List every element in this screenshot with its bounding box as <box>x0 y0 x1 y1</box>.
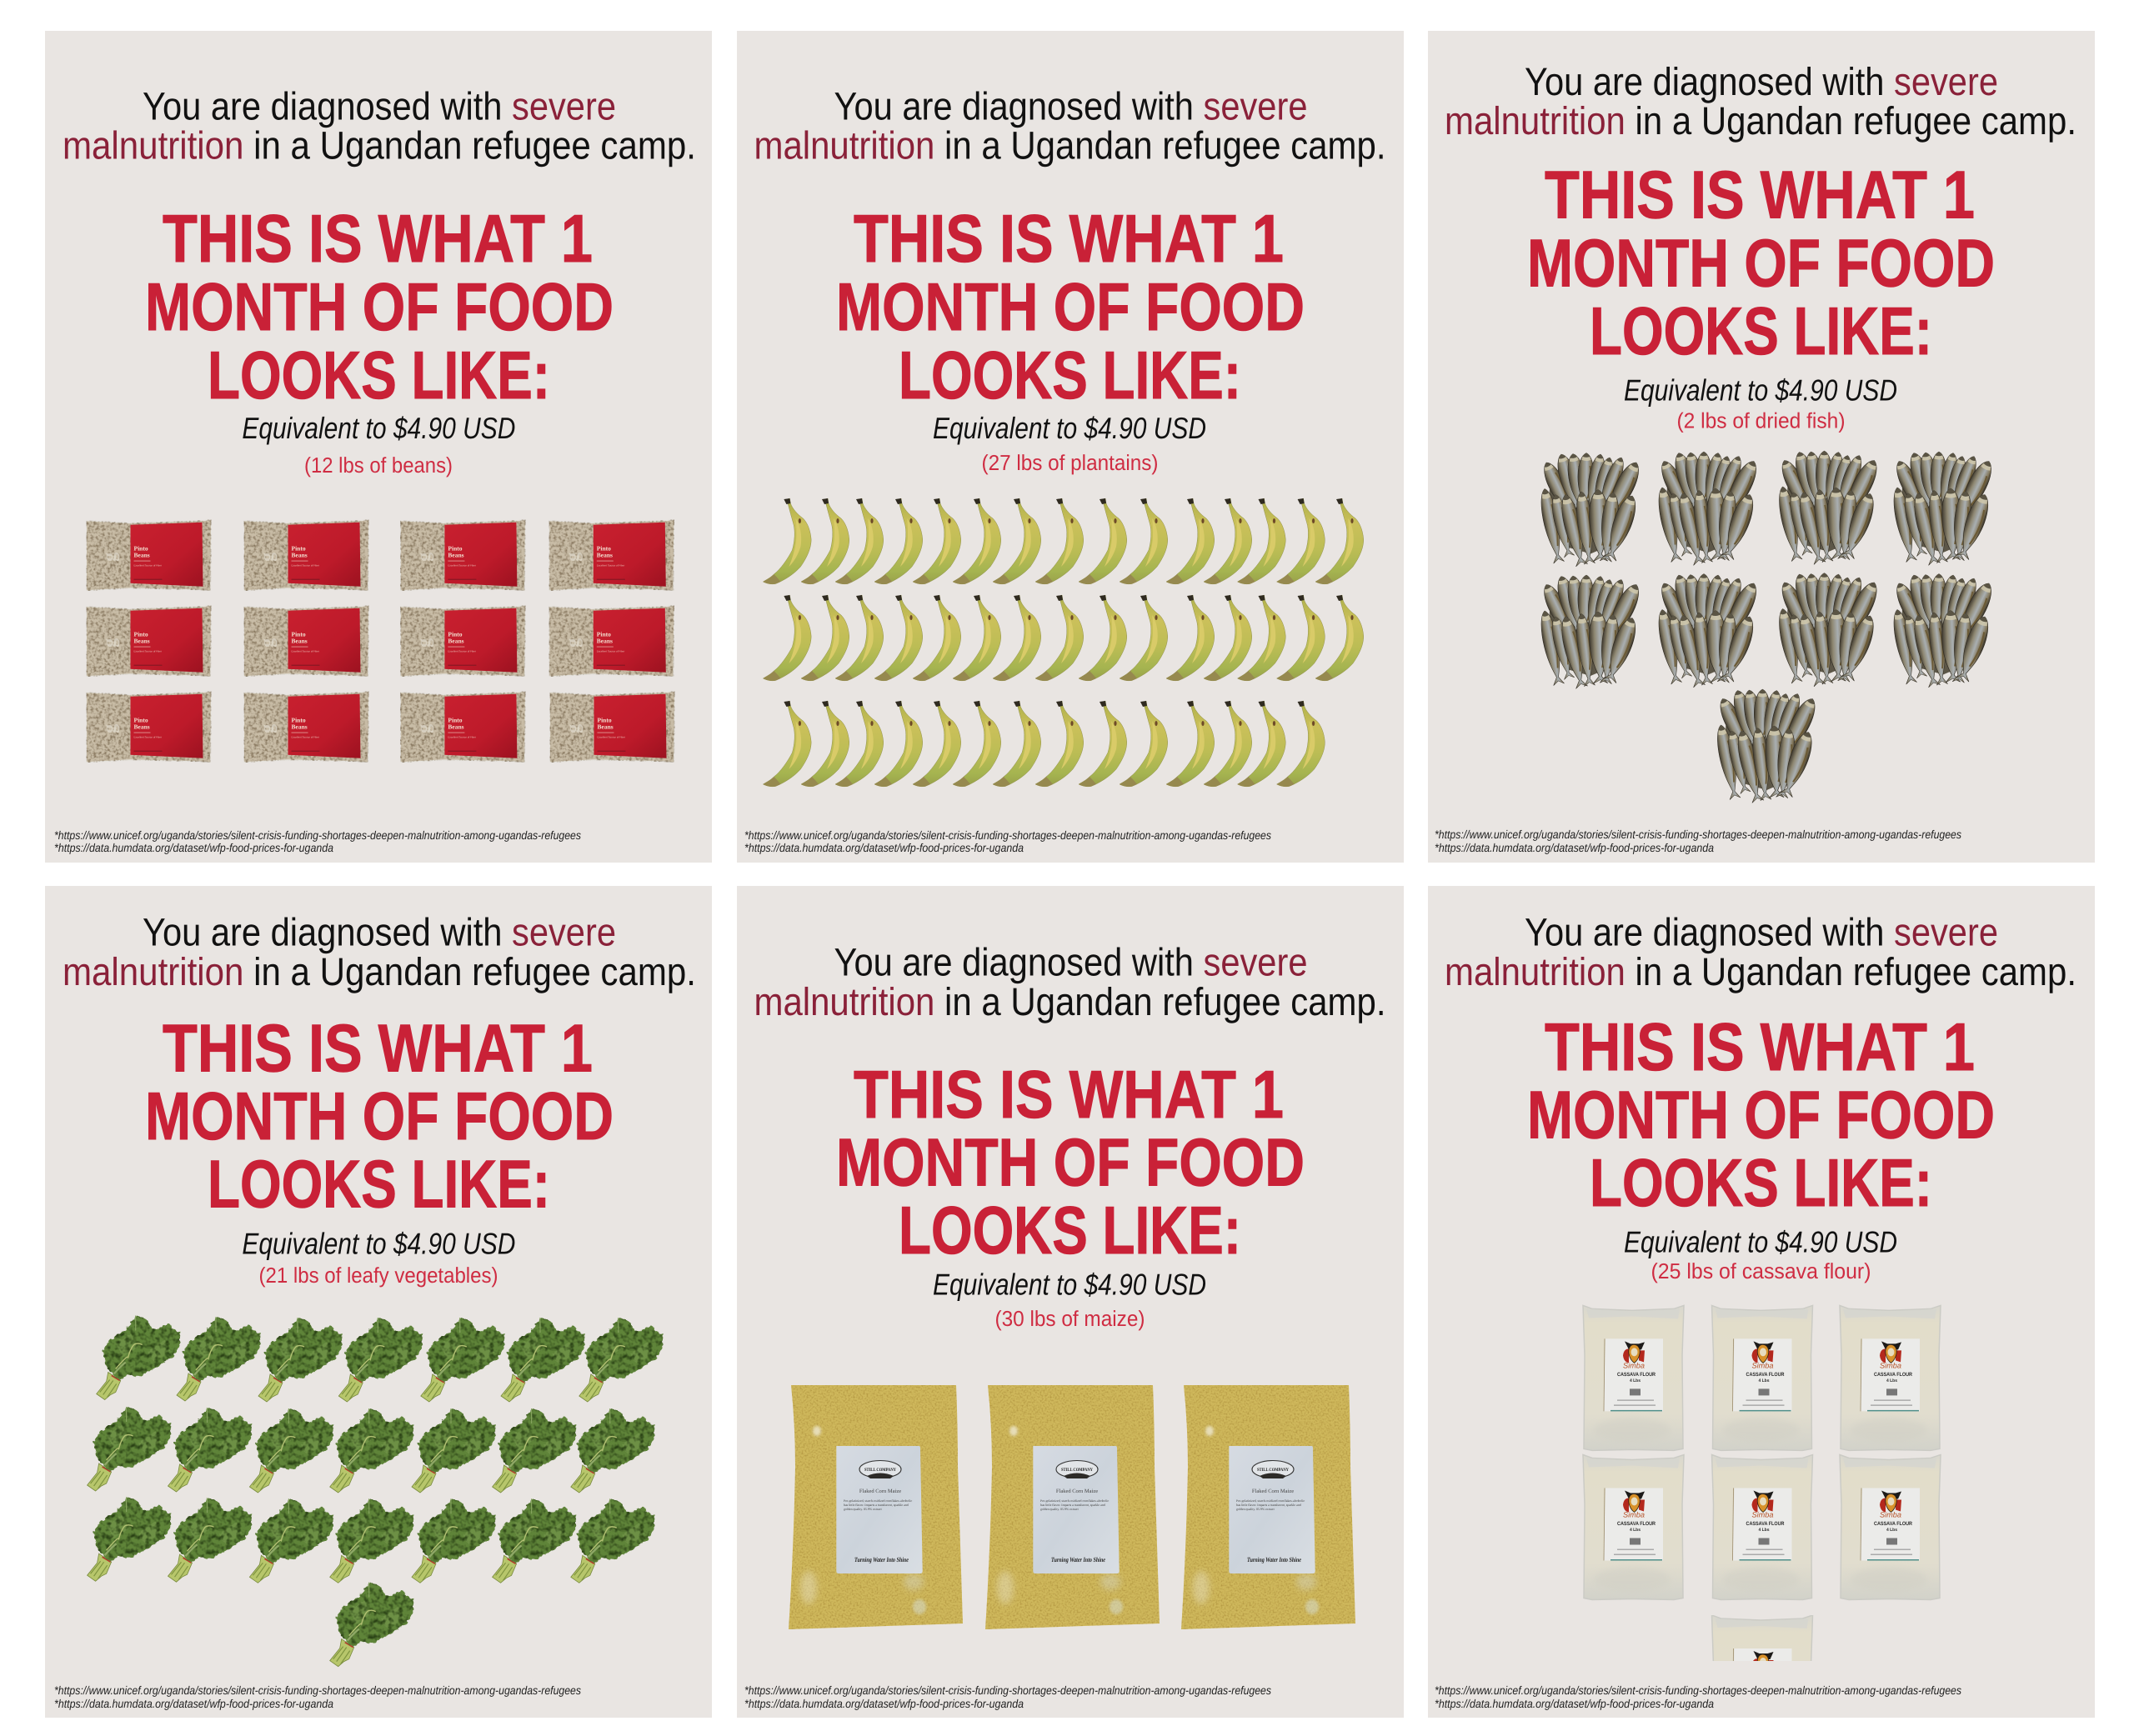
panel: leafy vegetables <box>45 886 712 1718</box>
heading: THIS IS WHAT 1 <box>1545 1010 1975 1085</box>
icon: cassava bag 5: Simba <box>1752 1510 1774 1518</box>
icon: cassava bag 4: 4 Lbs <box>1630 1528 1641 1533</box>
icons: 12 bags of beans: g <box>98 553 120 562</box>
icons: 12 bags of beans: g <box>413 553 433 562</box>
heading <box>145 1011 614 1223</box>
sources: *https://www.unicef.org/uganda/stories/silent-crisis-funding-shortages-deepen-malnutrition-among-ugandas-refugees <box>744 828 1271 842</box>
icons: 12 bags of beans: Beans <box>597 552 613 559</box>
icons: 12 bags of beans: Beans <box>448 723 464 731</box>
icons: 12 bags of beans: Beans <box>597 723 614 731</box>
icons: 12 bags of beans: Pinto <box>448 631 463 638</box>
sources: *https://data.humdata.org/dataset/wfp-food-prices-for-uganda <box>1435 1697 1714 1710</box>
intro text <box>63 909 696 993</box>
icons: 12 bags of beans: Beans <box>292 552 308 559</box>
sources <box>744 828 1271 854</box>
sources: *https://www.unicef.org/uganda/stories/silent-crisis-funding-shortages-deepen-malnutrition-among-ugandas-refugees <box>54 1683 581 1697</box>
equivalent price: Equivalent to $4.90 USD <box>933 1267 1206 1301</box>
sources: *https://www.unicef.org/uganda/stories/silent-crisis-funding-shortages-deepen-malnutrition-among-ugandas-refugees <box>54 828 581 842</box>
heading: THIS IS WHAT 1 <box>854 1058 1284 1133</box>
intro text: You are diagnosed with severe <box>143 909 616 953</box>
panel: cassava flour <box>1428 886 2095 1736</box>
heading: MONTH OF FOOD <box>836 1126 1305 1201</box>
icon: cassava bag 5 <box>1712 1455 1812 1600</box>
intro text <box>754 939 1385 1023</box>
heading: MONTH OF FOOD <box>1527 226 1995 301</box>
icons: 12 bags of beans: Excellent Source of Fiber <box>133 736 162 739</box>
heading: LOOKS LIKE: <box>208 1148 550 1223</box>
intro text: malnutrition in a Ugandan refugee camp. <box>1445 98 2076 143</box>
icons: 12 bags of beans: Excellent Source of Fiber <box>448 564 476 568</box>
sources: *https://data.humdata.org/dataset/wfp-food-prices-for-uganda <box>54 1697 333 1710</box>
intro text <box>1445 909 2076 993</box>
icons: 12 bags of beans: Beans <box>597 638 613 645</box>
icons: 12 bags of beans: Excellent Source of Fiber <box>448 736 476 739</box>
icon: maize bag 2: golden quality. 85.9% extract <box>1040 1508 1080 1511</box>
icons: 12 bags of beans: Beans <box>292 723 308 731</box>
icons: 12 bags of beans: Beans <box>133 723 150 731</box>
heading: MONTH OF FOOD <box>836 270 1305 345</box>
icon: cassava bag 5: CASSAVA FLOUR <box>1746 1521 1785 1527</box>
icon: cassava bag 6 <box>1840 1455 1941 1600</box>
icon: cassava bag 1: 4 Lbs <box>1630 1378 1641 1383</box>
intro text: You are diagnosed with severe <box>1525 909 1998 953</box>
icon: maize bag 2: Pre-gelatinized, starch-oxidized cornflakes-alcoholic <box>1040 1499 1109 1503</box>
heading: LOOKS LIKE: <box>208 338 550 413</box>
icon: cassava bag 3: Simba <box>1880 1361 1901 1369</box>
icon: maize bag 1: STILL COMPANY <box>864 1468 896 1473</box>
icons: 12 bags of beans: Pinto <box>597 631 611 638</box>
equivalent price: Equivalent to $4.90 USD <box>933 411 1206 445</box>
icons: 12 bags of beans: Pinto <box>133 631 148 638</box>
icons: 12 bags of beans: Pinto <box>597 545 611 553</box>
icon: cassava bag 2: 4 Lbs <box>1759 1378 1770 1383</box>
heading: LOOKS LIKE: <box>1590 1146 1932 1221</box>
icons: 12 bags of beans: Pinto <box>292 631 306 638</box>
icon: cassava bag 6: Simba <box>1880 1510 1901 1518</box>
sources <box>744 1683 1271 1710</box>
icons: 12 bags of beans: Excellent Source of Fiber <box>292 650 319 653</box>
icons: 12 bags of beans: Excellent Source of Fiber <box>448 650 476 653</box>
icons: 12 bags of beans: Excellent Source of Fiber <box>597 650 624 653</box>
icon: maize bag 2: has little flavor. Imparts a translucent, sparkle and <box>1040 1503 1105 1507</box>
icons: 12 bags of beans: Pinto <box>448 717 463 724</box>
icons: 12 bags of beans: Pinto <box>597 717 612 724</box>
icons: 22 bunches of leafy vegetables <box>88 1315 664 1667</box>
icons: 12 bags of beans: Pinto <box>448 545 463 553</box>
icon: maize bag 2: Flaked Corn Maize <box>1056 1488 1098 1494</box>
heading: LOOKS LIKE: <box>899 1193 1241 1268</box>
quantity: (30 lbs of maize) <box>995 1306 1145 1331</box>
icons: 12 bags of beans: Beans <box>292 638 308 645</box>
icons: 12 bags of beans: Beans <box>133 552 150 559</box>
quantity: (25 lbs of cassava flour) <box>1651 1258 1871 1283</box>
equivalent price: Equivalent to $4.90 USD <box>242 1226 515 1260</box>
icons: 12 bags of beans: Pinto <box>133 545 148 553</box>
sources <box>54 1683 581 1710</box>
icons: 12 bags of beans: g <box>257 638 277 648</box>
icons: 12 bags of beans: Excellent Source of Fiber <box>133 650 162 653</box>
heading: MONTH OF FOOD <box>145 270 614 345</box>
icon: maize bag 1: has little flavor. Imparts a translucent, sparkle and <box>844 1503 909 1507</box>
icon: cassava bag 6: CASSAVA FLOUR <box>1874 1521 1912 1527</box>
panel: maize <box>737 886 1404 1718</box>
icons: 12 bags of beans: g <box>257 724 277 733</box>
icon: cassava bag 2: Simba <box>1752 1361 1774 1369</box>
icon: maize bag 2: STILL COMPANY <box>1061 1468 1093 1473</box>
intro text: malnutrition in a Ugandan refugee camp. <box>63 123 696 167</box>
heading <box>145 202 614 413</box>
icons: 12 bags of beans: g <box>98 724 120 733</box>
heading <box>1527 158 1995 369</box>
intro text <box>63 83 696 167</box>
icon: cassava bag 3: 4 Lbs <box>1886 1378 1897 1383</box>
icons: 9 bundles of dried fish <box>1537 450 1997 803</box>
icon: maize bag 1: golden quality. 85.9% extract <box>844 1508 883 1511</box>
panel: plantains <box>737 31 1404 863</box>
sources <box>1435 1683 1961 1710</box>
icon: cassava bag 2: CASSAVA FLOUR <box>1746 1372 1785 1378</box>
intro text: You are diagnosed with severe <box>1525 59 1998 103</box>
intro text: You are diagnosed with severe <box>143 83 616 128</box>
heading: THIS IS WHAT 1 <box>1545 158 1975 233</box>
icons: 12 bags of beans: Excellent Source of Fiber <box>292 564 319 568</box>
icons: 12 bags of beans: Pinto <box>133 717 148 724</box>
intro text: You are diagnosed with severe <box>834 83 1307 128</box>
icon: cassava bag 1: CASSAVA FLOUR <box>1617 1372 1656 1378</box>
icon: cassava bag 3 <box>1840 1305 1941 1450</box>
icon: cassava bag 3: CASSAVA FLOUR <box>1874 1372 1912 1378</box>
icon: maize bag 1: Pre-gelatinized, starch-oxidized cornflakes-alcoholic <box>844 1499 912 1503</box>
icons: 12 bags of beans: Pinto <box>292 545 306 553</box>
quantity: (21 lbs of leafy vegetables) <box>258 1263 498 1288</box>
heading <box>836 1058 1305 1268</box>
icons: 12 bags of beans: g <box>562 553 583 562</box>
icons: 12 bags of beans: Excellent Source of Fiber <box>133 564 162 568</box>
heading: THIS IS WHAT 1 <box>163 1011 593 1086</box>
icons: 12 bags of beans: Beans <box>448 638 464 645</box>
sources: *https://data.humdata.org/dataset/wfp-food-prices-for-uganda <box>1435 841 1714 854</box>
icon: cassava bag 4 <box>1583 1455 1684 1600</box>
icons: 12 bags of beans: Beans <box>448 552 464 559</box>
icon: cassava bag 7 (cropped) <box>1711 1615 1814 1661</box>
icon: cassava bag 4: CASSAVA FLOUR <box>1617 1521 1656 1527</box>
icon: maize bag 3: Flaked Corn Maize <box>1252 1488 1294 1494</box>
icons: 12 bags of beans: Beans <box>133 638 150 645</box>
intro text: You are diagnosed with severe <box>834 939 1307 983</box>
equivalent price: Equivalent to $4.90 USD <box>1624 373 1897 408</box>
heading: LOOKS LIKE: <box>899 338 1241 413</box>
heading <box>1527 1010 1995 1221</box>
icons: 12 bags of beans: g <box>257 553 277 562</box>
equivalent price: Equivalent to $4.90 USD <box>1624 1225 1897 1259</box>
icon: maize bag 2: Turning Water Into Shine <box>1051 1556 1105 1563</box>
icons: 12 bags of beans: g <box>413 638 433 648</box>
intro text <box>754 83 1385 167</box>
icon: maize bag 3: Pre-gelatinized, starch-oxidized cornflakes-alcoholic <box>1236 1499 1305 1503</box>
icon: cassava bag 6: 4 Lbs <box>1886 1528 1897 1533</box>
intro text: malnutrition in a Ugandan refugee camp. <box>1445 949 2076 993</box>
sources <box>54 828 581 854</box>
icon: maize bag 1: Flaked Corn Maize <box>859 1488 901 1494</box>
icons: 12 bags of beans: g <box>413 724 433 733</box>
heading: THIS IS WHAT 1 <box>163 202 593 277</box>
icon: cassava bag 2 <box>1712 1305 1812 1450</box>
icons: 12 bags of beans: g <box>562 724 584 733</box>
quantity: (2 lbs of dried fish) <box>1677 408 1846 433</box>
icon: maize bag 3: STILL COMPANY <box>1257 1468 1289 1473</box>
icons: 12 bags of beans <box>87 520 675 763</box>
icon: maize bag 3: has little flavor. Imparts a translucent, sparkle and <box>1236 1503 1301 1507</box>
icon: cassava bag 1 <box>1583 1305 1684 1450</box>
icon: cassava bag 5: 4 Lbs <box>1759 1528 1770 1533</box>
icon: maize bag 3: golden quality. 85.9% extract <box>1236 1508 1275 1511</box>
intro text <box>1445 59 2076 143</box>
sources: *https://data.humdata.org/dataset/wfp-food-prices-for-uganda <box>54 841 333 854</box>
icons: 12 bags of beans: Excellent Source of Fiber <box>597 736 625 739</box>
quantity: (12 lbs of beans) <box>304 453 453 478</box>
icon: maize bag 1 <box>789 1385 963 1629</box>
heading: THIS IS WHAT 1 <box>854 202 1284 277</box>
icon: maize bag 1: Turning Water Into Shine <box>854 1556 909 1563</box>
panel: beans <box>45 31 712 863</box>
icons: 12 bags of beans: g <box>562 638 583 648</box>
icon: maize bag 3: Turning Water Into Shine <box>1247 1556 1301 1563</box>
icon: maize bag 2 <box>985 1385 1160 1629</box>
icons: 12 bags of beans: Pinto <box>292 717 306 724</box>
heading: MONTH OF FOOD <box>145 1079 614 1154</box>
sources <box>1435 828 1961 854</box>
intro text: malnutrition in a Ugandan refugee camp. <box>63 949 696 993</box>
heading: MONTH OF FOOD <box>1527 1078 1995 1153</box>
icon: maize bag 3 <box>1181 1385 1355 1629</box>
sources: *https://data.humdata.org/dataset/wfp-food-prices-for-uganda <box>744 841 1024 854</box>
icon: cassava bag 1: Simba <box>1623 1361 1645 1369</box>
heading <box>836 202 1305 413</box>
heading: LOOKS LIKE: <box>1590 294 1932 369</box>
icons: 44 plantains <box>763 498 1364 787</box>
intro text: malnutrition in a Ugandan refugee camp. <box>754 123 1385 167</box>
quantity: (27 lbs of plantains) <box>982 450 1159 475</box>
sources: *https://www.unicef.org/uganda/stories/silent-crisis-funding-shortages-deepen-malnutrition-among-ugandas-refugees <box>1435 1683 1961 1697</box>
icons: 12 bags of beans: Excellent Source of Fiber <box>597 564 624 568</box>
intro text: malnutrition in a Ugandan refugee camp. <box>754 979 1385 1023</box>
icons: 12 bags of beans: Excellent Source of Fiber <box>292 736 319 739</box>
panel: dried fish <box>1428 31 2095 863</box>
equivalent price: Equivalent to $4.90 USD <box>242 411 515 445</box>
icons: 12 bags of beans: g <box>98 638 120 648</box>
sources: *https://www.unicef.org/uganda/stories/silent-crisis-funding-shortages-deepen-malnutrition-among-ugandas-refugees <box>744 1683 1271 1697</box>
icon: cassava bag 4: Simba <box>1623 1510 1645 1518</box>
sources: *https://www.unicef.org/uganda/stories/silent-crisis-funding-shortages-deepen-malnutrition-among-ugandas-refugees <box>1435 828 1961 841</box>
sources: *https://data.humdata.org/dataset/wfp-food-prices-for-uganda <box>744 1697 1024 1710</box>
